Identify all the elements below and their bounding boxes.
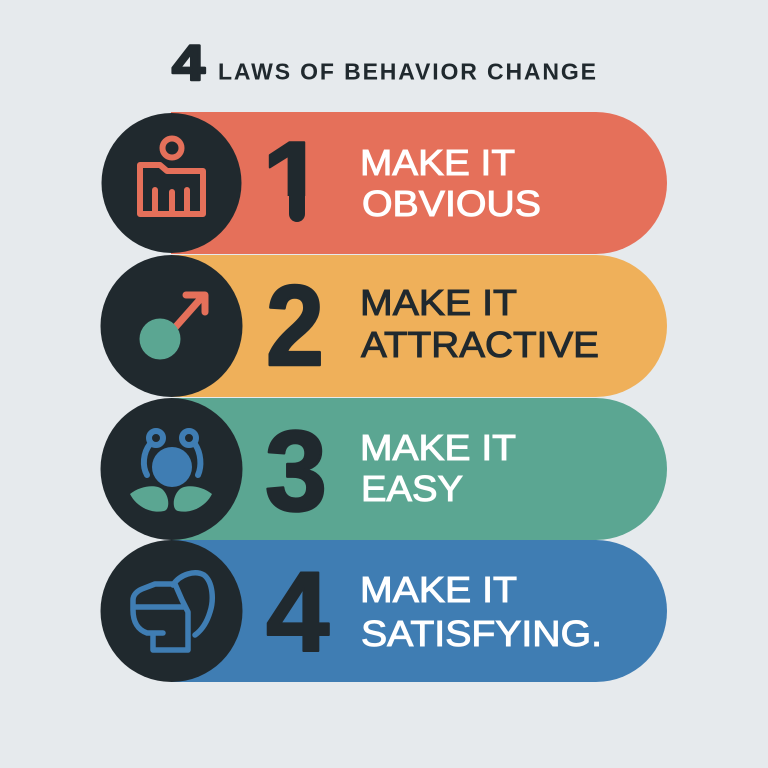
heading: make it satisfying: MAKE IT [360, 569, 517, 610]
panel: law 3 make it easy [171, 398, 667, 540]
heading: make it attractive: MAKE IT [360, 282, 517, 323]
title: 4 [172, 35, 205, 91]
number 4: 4 [266, 549, 329, 676]
icon: flower with figures [100, 398, 242, 540]
title [172, 35, 596, 91]
heading: make it obvious: OBVIOUS [362, 183, 541, 224]
heading: make it attractive: ATTRACTIVE [361, 324, 599, 365]
number 2: 2 [266, 263, 324, 390]
panel: law 2 make it attractive [171, 255, 667, 397]
heading: make it obvious: MAKE IT [360, 142, 515, 183]
icon: head with cup [100, 540, 242, 682]
heading: make it satisfying: SATISFYING. [361, 613, 602, 654]
panel: law 4 make it satisfying [171, 540, 667, 682]
number 1: 1 [262, 119, 325, 246]
title: LAWS OF BEHAVIOR CHANGE [218, 58, 596, 84]
heading: make it easy: MAKE IT [360, 427, 516, 468]
heading: make it easy: EASY [361, 468, 463, 509]
panel: law 1 make it obvious [171, 112, 667, 254]
icon: folder chart with circle [102, 113, 242, 253]
icon: arrow with circle [100, 255, 242, 397]
number 3: 3 [265, 408, 327, 535]
